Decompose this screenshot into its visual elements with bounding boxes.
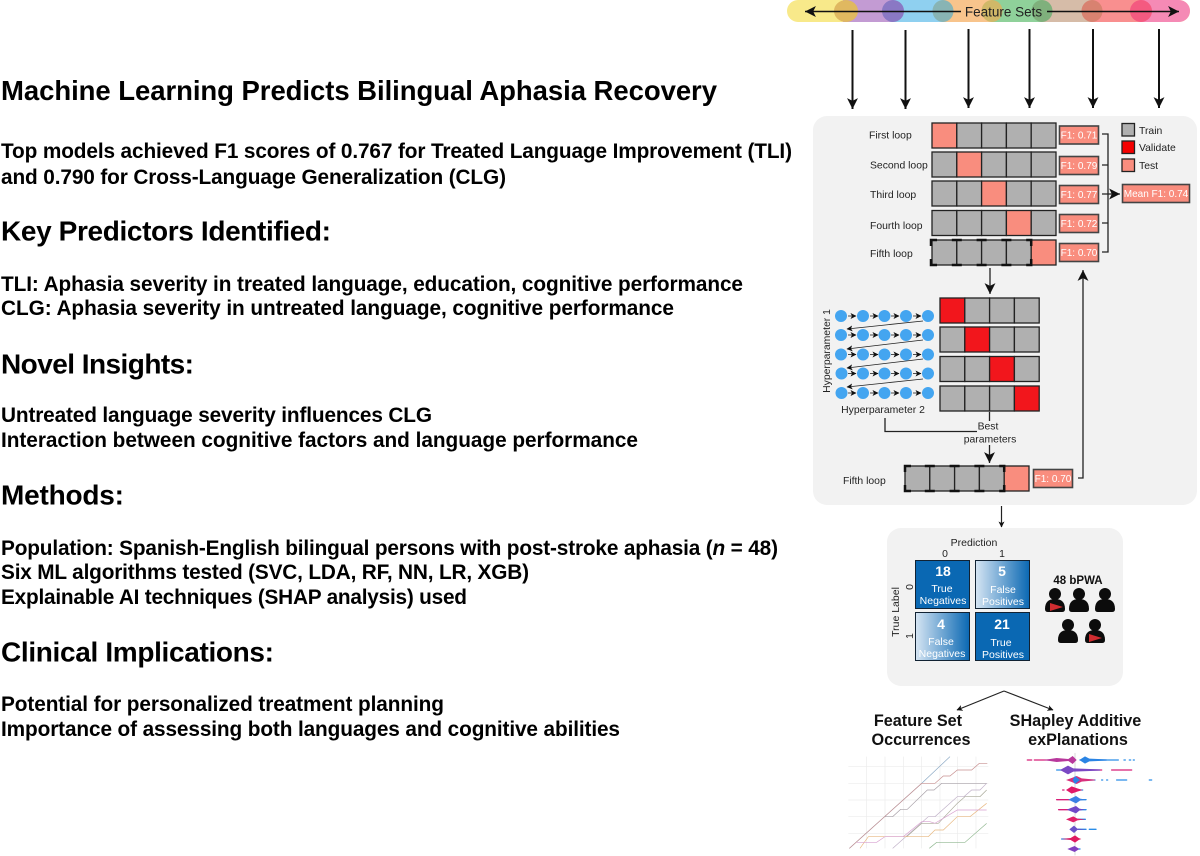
matrix cell: false negatives: Negatives bbox=[919, 648, 965, 660]
text block: methods: Population: Spanish-English bilingual persons with post-stroke aphasia (n = 48) bbox=[1, 537, 778, 560]
matrix cell: true negatives: True bbox=[931, 583, 953, 595]
matrix cell: true positives bbox=[976, 612, 1030, 661]
matrix cell: true positives: 21 bbox=[994, 616, 1010, 632]
outer loop rows: Third loop bbox=[870, 190, 916, 201]
arrow: to confusion matrix panel bbox=[1000, 506, 1002, 527]
feature sets bar: Feature Sets bbox=[965, 4, 1042, 20]
F1 score boxes bbox=[1060, 126, 1098, 262]
arrows: to result plots bbox=[957, 691, 1053, 710]
axis labels bbox=[890, 537, 1005, 639]
text block: clinical implications: Importance of assessing both languages and cognitive abilities bbox=[1, 718, 620, 741]
matrix cell: false negatives: 4 bbox=[937, 616, 945, 632]
text block: novel insights: Interaction between cognitive factors and language performance bbox=[1, 429, 638, 452]
text block: methods bbox=[1, 537, 778, 609]
retrained fifth loop: F1: 0.70 bbox=[1035, 474, 1072, 485]
text block: top model scores: and 0.790 for Cross-Language Generalization (CLG) bbox=[1, 166, 506, 189]
axis labels: 0 bbox=[905, 584, 916, 590]
heading: SHAP bbox=[1010, 712, 1141, 749]
feature sets bar bbox=[787, 0, 1190, 22]
hyperparameter grid: Hyperparameter 1 bbox=[822, 309, 833, 393]
F1 score boxes: F1: 0.70 bbox=[1061, 248, 1098, 259]
heading: novel insights: Novel Insights: bbox=[1, 348, 194, 380]
mean F1 box: Mean F1: 0.74 bbox=[1124, 189, 1189, 200]
retrained fifth loop: Fifth loop bbox=[843, 476, 886, 487]
outer loop rows: Second loop bbox=[870, 160, 928, 172]
inner loop rows bbox=[940, 298, 1039, 411]
text block: top model scores bbox=[1, 140, 792, 189]
axis labels: Prediction bbox=[951, 537, 998, 549]
matrix cell: true negatives: Negatives bbox=[920, 595, 966, 607]
chart: feature set occurrences bbox=[848, 757, 988, 848]
text block: key predictors: TLI: Aphasia severity in treated language, education, cognitive performance bbox=[1, 273, 743, 296]
panel: nested cross-validation bbox=[813, 116, 1197, 505]
F1 score boxes: F1: 0.77 bbox=[1061, 190, 1098, 201]
heading: SHAP: exPlanations bbox=[1028, 731, 1128, 749]
text block: key predictors bbox=[1, 273, 743, 320]
matrix cell: false negatives: False bbox=[928, 636, 954, 648]
matrix cell: true negatives: 18 bbox=[935, 563, 951, 579]
F1 score boxes: F1: 0.79 bbox=[1061, 161, 1098, 172]
text block: methods: Explainable AI techniques (SHAP analysis) used bbox=[1, 586, 467, 609]
axis labels: 1 bbox=[905, 633, 916, 639]
arrow: best model score back up bbox=[1078, 270, 1083, 478]
mean F1 box bbox=[1122, 184, 1190, 202]
matrix cell: false negatives bbox=[916, 612, 970, 660]
legend bbox=[1122, 124, 1176, 172]
48 bPWA label: 48 bPWA bbox=[1053, 575, 1103, 587]
heading: SHAP: SHapley Additive bbox=[1010, 712, 1141, 730]
heading: feature set occurrences bbox=[872, 712, 970, 749]
outer loop rows bbox=[869, 123, 1056, 265]
text block: methods: Six ML algorithms tested (SVC, LDA, RF, NN, LR, XGB) bbox=[1, 561, 529, 584]
heading: methods: Methods: bbox=[1, 480, 124, 510]
panel: confusion matrix bbox=[887, 528, 1123, 686]
text block: clinical implications bbox=[1, 693, 620, 741]
legend: Train bbox=[1139, 126, 1163, 137]
bracket and arrow to mean F1 bbox=[1102, 134, 1120, 252]
axis labels: 1 bbox=[999, 549, 1005, 560]
text block: clinical implications: Potential for personalized treatment planning bbox=[1, 693, 444, 716]
text block: novel insights bbox=[1, 404, 638, 452]
matrix cell: true positives: Positives bbox=[982, 649, 1024, 661]
axis labels: True Label bbox=[890, 587, 902, 637]
heading: feature set occurrences: Occurrences bbox=[872, 731, 970, 749]
best parameters connector and label bbox=[885, 412, 1016, 463]
heading: clinical implications: Clinical Implications: bbox=[1, 636, 274, 668]
matrix cell: false positives: False bbox=[990, 584, 1016, 596]
arrow: down to inner loop bbox=[989, 268, 991, 294]
legend: Validate bbox=[1139, 143, 1176, 154]
retrained fifth loop bbox=[843, 466, 1072, 491]
icon: patients bbox=[1045, 588, 1115, 643]
F1 score boxes: F1: 0.72 bbox=[1061, 219, 1098, 230]
matrix cell: false positives: 5 bbox=[998, 563, 1006, 579]
heading: key predictors: Key Predictors Identified: bbox=[1, 216, 331, 246]
matrix cell: false positives: Positives bbox=[982, 596, 1024, 608]
best parameters connector and label: Best bbox=[978, 422, 999, 432]
hyperparameter grid: Hyperparameter 2 bbox=[841, 405, 925, 416]
title: Machine Learning Predicts Bilingual Aphasia Recovery bbox=[1, 75, 718, 106]
text block: top model scores: Top models achieved F1 scores of 0.767 for Treated Language Improvement (TLI) bbox=[1, 140, 792, 163]
text block: key predictors: CLG: Aphasia severity in untreated language, cognitive performance bbox=[1, 297, 674, 320]
outer loop rows: Fourth loop bbox=[870, 221, 923, 232]
legend: Test bbox=[1139, 161, 1158, 172]
matrix cell: false positives bbox=[976, 560, 1030, 608]
matrix cell: true negatives bbox=[916, 560, 970, 608]
chart: SHAP beeswarm bbox=[1027, 753, 1152, 855]
outer loop rows: Fifth loop bbox=[870, 249, 913, 260]
axis labels: 0 bbox=[942, 549, 948, 560]
arrows: feature sets into cross-validation bbox=[852, 29, 1159, 109]
hyperparameter grid bbox=[822, 309, 934, 416]
heading: feature set occurrences: Feature Set bbox=[874, 712, 963, 730]
matrix cell: true positives: True bbox=[990, 637, 1012, 649]
best parameters connector and label: parameters bbox=[964, 434, 1016, 446]
F1 score boxes: F1: 0.71 bbox=[1061, 130, 1098, 142]
outer loop rows: First loop bbox=[869, 130, 912, 142]
text block: novel insights: Untreated language severity influences CLG bbox=[1, 404, 432, 427]
